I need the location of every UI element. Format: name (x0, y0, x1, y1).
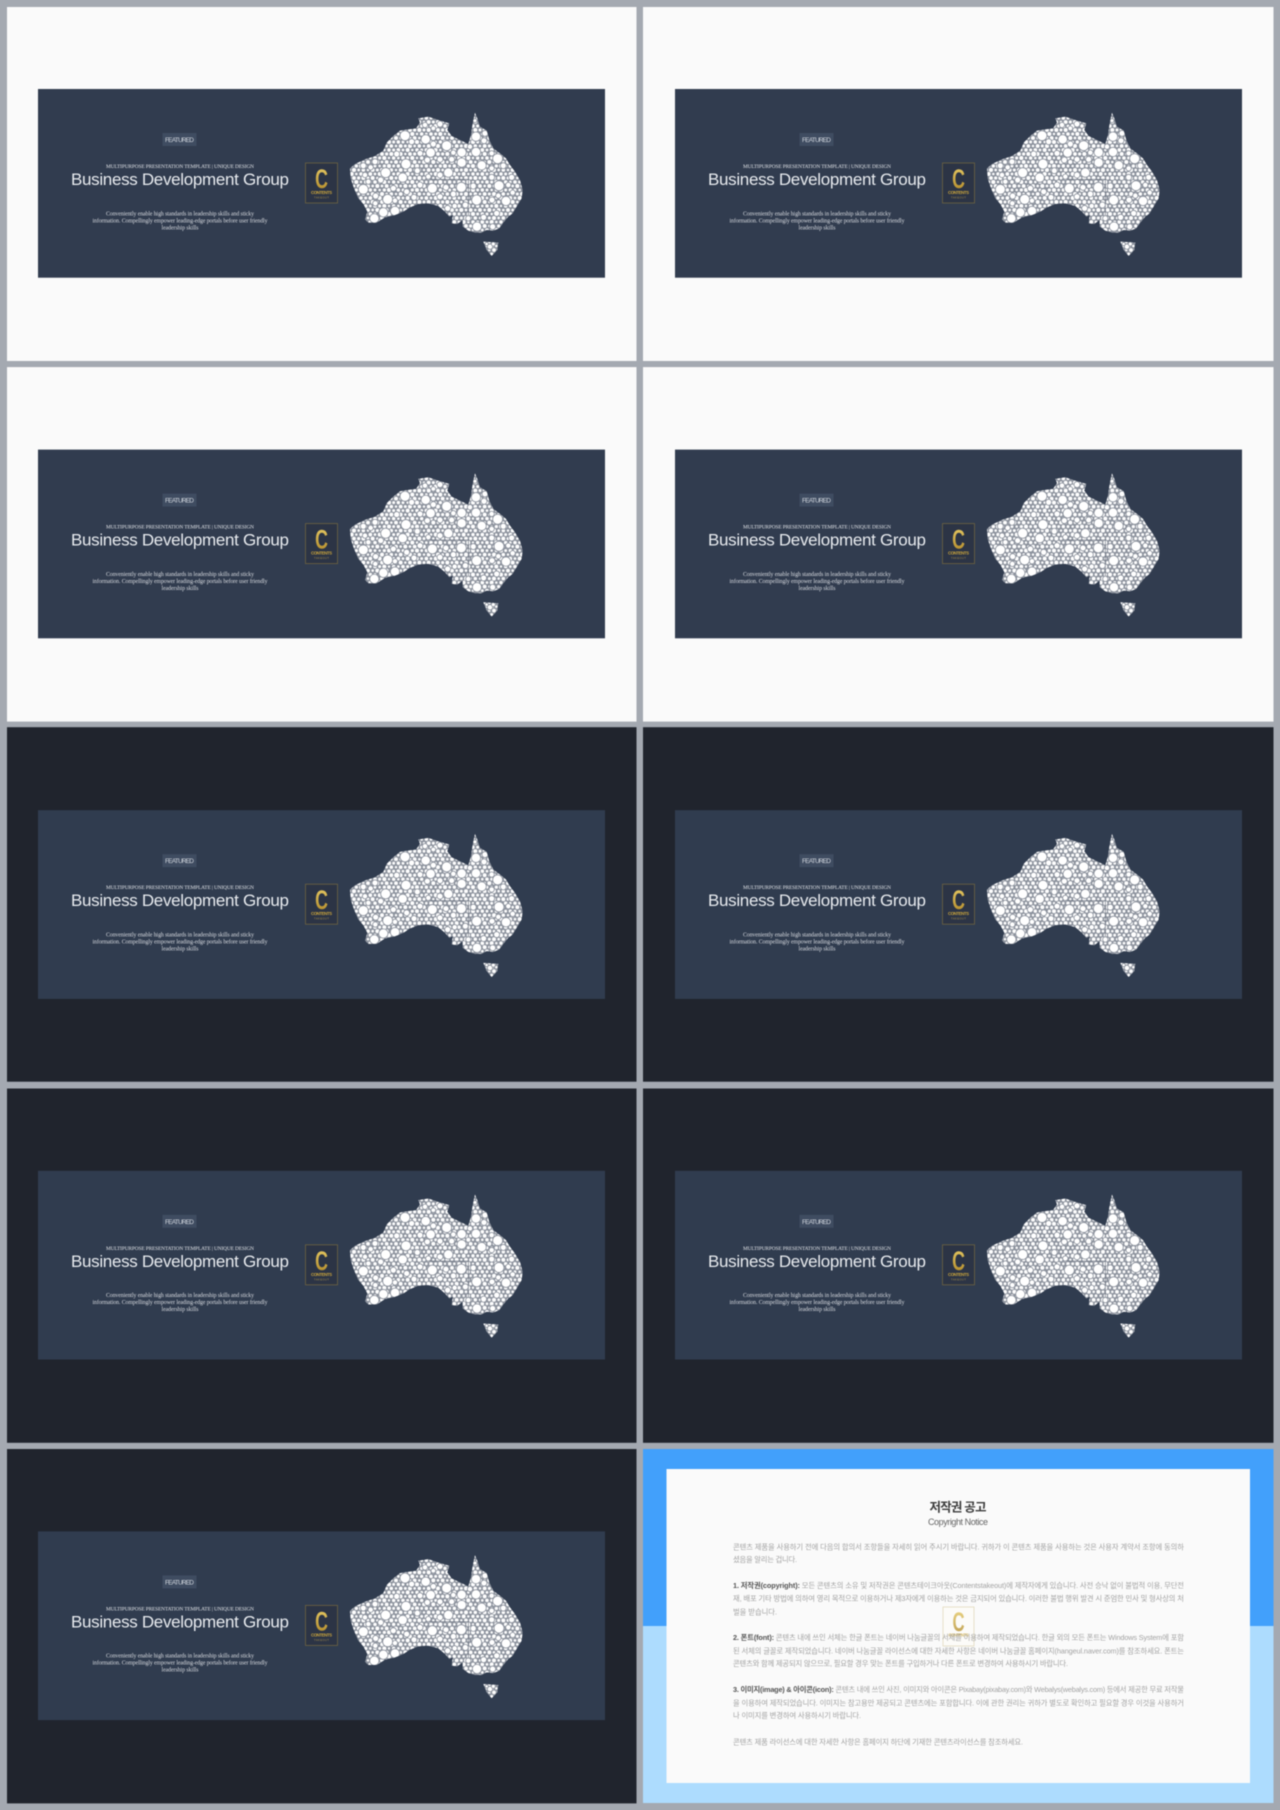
slide background (7, 1088, 636, 1443)
description: leadership skills (162, 225, 199, 231)
description: leadership skills (162, 1668, 199, 1674)
map of Australia (347, 110, 527, 258)
heading: Business Development Group (71, 1252, 289, 1271)
featured tag (162, 133, 196, 146)
description (92, 211, 268, 231)
section 2: font: 된 서체의 글꼴로 제작되었습니다. 네이버 나눔글꼴 라이선스에 대한 자세한 사항은 네이버 나눔글꼴 홈페이지(hangeul.naver.com)를 참조하세요. 폰트는 (733, 1646, 1184, 1656)
section 3: image and icon: 3. 이미지(image) & 아이콘(icon): 콘텐츠 내에 쓰인 사진, 이미지와 아이콘은 Pixabay(pixabay.com)와 Webalys(webalys.com) 등에서 제공한 무료 저작물 (733, 1685, 1184, 1694)
description: information. Compellingly empower leading-edge portals before user friendly (92, 939, 268, 946)
featured tag (800, 854, 834, 867)
logo (306, 163, 338, 203)
logo (306, 1245, 338, 1285)
featured tag (800, 133, 834, 146)
slide background (7, 367, 636, 722)
slide 3 (7, 367, 636, 722)
banner panel (675, 450, 1242, 638)
description: Conveniently enable high standards in leadership skills and sticky (743, 572, 891, 578)
logo: CONTENTS (311, 1632, 332, 1637)
description: information. Compellingly empower leading-edge portals before user friendly (92, 1299, 268, 1306)
subtitle: MULTIPURPOSE PRESENTATION TEMPLATE | UNIQUE DESIGN (106, 164, 254, 170)
description (92, 932, 268, 952)
slide 6 (643, 727, 1274, 1082)
description: leadership skills (162, 586, 199, 592)
map of Australia (347, 1552, 527, 1701)
description (730, 932, 905, 952)
banner panel (38, 89, 605, 278)
section 3: image and icon: 을 이용하여 제작되었습니다. 이미지는 참고용만 제공되고 콘텐츠에는 포함합니다. 이에 관한 권리는 귀하가 별도로 확인하고 필요할 경우 이것을 사용하거 (733, 1698, 1184, 1708)
section 1: copyright (733, 1581, 1184, 1616)
description: Conveniently enable high standards in leadership skills and sticky (106, 211, 254, 217)
banner panel (675, 1171, 1242, 1360)
logo: TAKEOUT (314, 917, 329, 921)
logo: CONTENTS (311, 190, 332, 195)
featured tag (162, 854, 196, 867)
logo (942, 884, 974, 924)
logo: C (952, 163, 965, 194)
description: information. Compellingly empower leading-edge portals before user friendly (730, 939, 905, 946)
heading: Business Development Group (71, 891, 289, 910)
banner panel (38, 1531, 605, 1720)
description (92, 572, 268, 592)
description: Conveniently enable high standards in leadership skills and sticky (106, 933, 254, 939)
featured tag: FEATURED (165, 1219, 194, 1226)
heading: Business Development Group (708, 1252, 926, 1271)
slide background (643, 367, 1274, 722)
map of Australia (984, 110, 1164, 258)
logo: C (315, 163, 328, 194)
subtitle: MULTIPURPOSE PRESENTATION TEMPLATE | UNIQUE DESIGN (106, 1606, 254, 1612)
featured tag (162, 1215, 196, 1228)
featured tag: FEATURED (165, 1579, 194, 1586)
slide 2 (643, 7, 1274, 361)
section 2: font: 2. 폰트(font): 콘텐츠 내에 쓰인 서체는 한글 폰트는 네이버 나눔글꼴의 서체를 이용하여 제작되었습니다. 한글 외의 모든 폰트는 Windows System에 포함 (733, 1633, 1184, 1642)
slide 8 (643, 1088, 1274, 1443)
slide background (7, 1449, 636, 1803)
description: information. Compellingly empower leading-edge portals before user friendly (730, 1299, 905, 1306)
description: leadership skills (798, 947, 836, 953)
logo: TAKEOUT (951, 1277, 966, 1281)
section 2: font: 콘텐츠와 함께 제공되지 않으므로, 필요할 경우 맞는 폰트를 구입하거나 다른 폰트로 변경하여 사용하시기 바랍니다. (733, 1659, 1068, 1668)
logo: TAKEOUT (314, 1638, 329, 1642)
slide background (7, 727, 636, 1082)
subtitle: MULTIPURPOSE PRESENTATION TEMPLATE | UNIQUE DESIGN (106, 525, 254, 531)
description (92, 1654, 268, 1674)
logo: C (952, 1245, 965, 1276)
description: information. Compellingly empower leading-edge portals before user friendly (92, 217, 268, 224)
logo: CONTENTS (311, 551, 332, 556)
description: Conveniently enable high standards in leadership skills and sticky (106, 572, 254, 578)
banner panel (675, 89, 1242, 278)
logo (942, 524, 974, 564)
logo (306, 884, 338, 924)
banner panel (38, 810, 605, 999)
featured tag: FEATURED (165, 498, 194, 505)
logo: TAKEOUT (951, 196, 966, 200)
watermark logo (943, 1607, 974, 1646)
featured tag (162, 1575, 196, 1588)
logo: CONTENTS (311, 1272, 332, 1277)
featured tag (800, 494, 834, 507)
logo (306, 1605, 338, 1645)
logo: TAKEOUT (951, 917, 966, 921)
logo: C (315, 524, 328, 555)
description: Conveniently enable high standards in leadership skills and sticky (743, 1293, 891, 1299)
heading: Business Development Group (71, 170, 289, 189)
section 2: font (733, 1633, 1184, 1668)
logo: CONTENTS (311, 911, 332, 916)
description: information. Compellingly empower leading-edge portals before user friendly (730, 578, 905, 585)
heading: Business Development Group (708, 891, 926, 910)
description: leadership skills (162, 947, 199, 953)
subtitle: MULTIPURPOSE PRESENTATION TEMPLATE | UNIQUE DESIGN (743, 164, 891, 170)
notice subtitle: Copyright Notice (928, 1517, 988, 1527)
slide 7 (7, 1088, 636, 1443)
description: Conveniently enable high standards in leadership skills and sticky (743, 933, 891, 939)
intro paragraph (733, 1542, 1184, 1564)
subtitle: MULTIPURPOSE PRESENTATION TEMPLATE | UNIQUE DESIGN (743, 885, 891, 891)
description: information. Compellingly empower leading-edge portals before user friendly (730, 217, 905, 224)
featured tag: FEATURED (165, 858, 194, 865)
logo: C (315, 884, 328, 915)
banner panel (38, 450, 605, 638)
subtitle: MULTIPURPOSE PRESENTATION TEMPLATE | UNIQUE DESIGN (106, 1246, 254, 1252)
featured tag: FEATURED (802, 858, 831, 865)
section 1: copyright: 1. 저작권(copyright): 모든 콘텐츠의 소유 및 저작권은 콘텐츠테이크아웃(Contentstakeout)에 제작자에게 있습니다. 사전 승낙 없이 불법적 이용, 무단전 (733, 1581, 1184, 1590)
logo: TAKEOUT (951, 556, 966, 560)
description (92, 1293, 268, 1313)
description: information. Compellingly empower leading-edge portals before user friendly (92, 578, 268, 585)
slide background (643, 727, 1274, 1082)
description (730, 572, 905, 592)
heading: Business Development Group (708, 531, 926, 550)
blue background top (643, 1449, 1274, 1626)
logo: TAKEOUT (314, 1277, 329, 1281)
subtitle: MULTIPURPOSE PRESENTATION TEMPLATE | UNIQUE DESIGN (106, 885, 254, 891)
slide 1 (7, 7, 636, 361)
section 1: copyright: 벌을 받습니다. (733, 1608, 777, 1616)
map of Australia (984, 831, 1164, 980)
slide background (7, 7, 636, 361)
section 3: image and icon (733, 1685, 1184, 1720)
logo (942, 1245, 974, 1285)
notice title: 저작권 공고 (930, 1500, 986, 1514)
description: Conveniently enable high standards in leadership skills and sticky (106, 1654, 254, 1660)
section 3: image and icon: 나 이미지를 변경하여 사용하시기 바랍니다. (733, 1711, 861, 1720)
description (730, 1293, 905, 1313)
map of Australia (984, 471, 1164, 619)
logo (306, 524, 338, 564)
map of Australia (984, 1192, 1164, 1340)
description: Conveniently enable high standards in leadership skills and sticky (106, 1293, 254, 1299)
featured tag: FEATURED (802, 498, 831, 505)
intro paragraph: 셨음을 알리는 겁니다. (733, 1555, 797, 1564)
section 1: copyright: 재, 배포 기타 방법에 의하여 영리 목적으로 이용하거나 제3자에게 이용하는 것은 금지되어 있습니다. 이러한 불법 행위 발견 시 준엄한 민사 및 형사상의 처 (733, 1594, 1184, 1603)
featured tag: FEATURED (802, 137, 831, 144)
logo: C (952, 884, 965, 915)
description: information. Compellingly empower leading-edge portals before user friendly (92, 1660, 268, 1667)
featured tag (800, 1215, 834, 1228)
description: leadership skills (798, 586, 836, 592)
logo: CONTENTS (948, 1272, 969, 1277)
logo: CONTENTS (948, 551, 969, 556)
slide 10: copyright notice (643, 1449, 1274, 1803)
closing note: 콘텐츠 제품 라이선스에 대한 자세한 사항은 홈페이지 하단에 기재한 콘텐츠라이선스를 참조하세요. (733, 1738, 1023, 1746)
slide 5 (7, 727, 636, 1082)
subtitle: MULTIPURPOSE PRESENTATION TEMPLATE | UNIQUE DESIGN (743, 1246, 891, 1252)
logo: TAKEOUT (314, 556, 329, 560)
banner panel (38, 1171, 605, 1360)
description: Conveniently enable high standards in leadership skills and sticky (743, 211, 891, 217)
description: leadership skills (798, 225, 836, 231)
description (730, 211, 905, 231)
subtitle: MULTIPURPOSE PRESENTATION TEMPLATE | UNIQUE DESIGN (743, 525, 891, 531)
logo (942, 163, 974, 203)
featured tag: FEATURED (802, 1219, 831, 1226)
heading: Business Development Group (71, 531, 289, 550)
slide 9 (7, 1449, 636, 1803)
watermark logo: CONTENTS (948, 1632, 969, 1638)
description: leadership skills (798, 1307, 836, 1313)
slide 4 (643, 367, 1274, 722)
watermark logo: C (952, 1607, 965, 1637)
notice card (666, 1469, 1250, 1783)
logo: C (315, 1606, 328, 1636)
intro paragraph: 콘텐츠 제품을 사용하기 전에 다음의 합의서 조항들을 자세히 읽어 주시기 바랍니다. 귀하가 이 콘텐츠 제품을 사용하는 것은 사용자 계약서 조항에 동의하 (733, 1542, 1184, 1552)
banner panel (675, 810, 1242, 999)
logo: C (952, 524, 965, 555)
slide background (643, 1088, 1274, 1443)
logo: C (315, 1245, 328, 1276)
logo: CONTENTS (948, 911, 969, 916)
map of Australia (347, 1192, 527, 1340)
map of Australia (347, 471, 527, 619)
slide background (643, 7, 1274, 361)
description: leadership skills (162, 1307, 199, 1313)
heading: Business Development Group (708, 170, 926, 189)
featured tag: FEATURED (165, 137, 194, 144)
heading: Business Development Group (71, 1612, 289, 1631)
map of Australia (347, 831, 527, 980)
featured tag (162, 494, 196, 507)
logo: TAKEOUT (314, 196, 329, 200)
light blue background bottom (643, 1626, 1274, 1803)
logo: CONTENTS (948, 190, 969, 195)
